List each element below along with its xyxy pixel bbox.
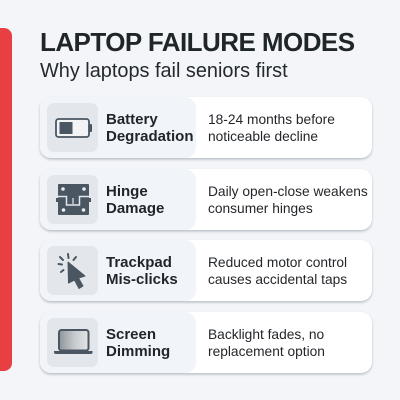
heading: hinge damage: Hinge xyxy=(106,182,148,200)
title: LAPTOP FAILURE MODES xyxy=(40,27,355,57)
description: screen xyxy=(208,326,325,359)
description: screen: Backlight fades, no xyxy=(208,326,324,342)
icon: hinge xyxy=(47,175,98,224)
icon: battery xyxy=(47,103,98,152)
left section: battery xyxy=(40,97,196,158)
description: battery: noticeable decline xyxy=(208,129,318,144)
heading: battery degradation xyxy=(106,110,194,145)
description: screen: replacement option xyxy=(208,344,325,359)
heading: trackpad mis-clicks: Mis-clicks xyxy=(106,271,178,288)
description: battery: 18-24 months before xyxy=(208,112,335,126)
description: battery xyxy=(208,112,335,144)
panel: screen dimming xyxy=(40,312,372,373)
heading: trackpad mis-clicks xyxy=(106,254,178,288)
panel: battery degradation xyxy=(40,97,372,158)
heading: screen dimming: Screen xyxy=(106,326,156,342)
description: trackpad: Reduced motor control xyxy=(208,254,347,270)
description: trackpad: causes accidental taps xyxy=(208,272,347,287)
heading: hinge damage: Damage xyxy=(106,200,164,217)
left section: screen xyxy=(40,312,196,373)
heading: trackpad mis-clicks: Trackpad xyxy=(106,254,172,270)
heading: battery degradation: Battery xyxy=(106,110,158,128)
icon: cursor clicks xyxy=(47,246,98,295)
description: hinge: Daily open-close weakens xyxy=(208,184,368,198)
description: hinge xyxy=(208,184,368,216)
panel: hinge damage xyxy=(40,169,372,230)
left section: trackpad xyxy=(40,240,196,301)
subtitle: Why laptops fail seniors first xyxy=(40,60,288,82)
icon: laptop xyxy=(47,318,98,367)
heading: screen dimming xyxy=(106,326,170,360)
description: trackpad xyxy=(208,254,347,287)
heading: screen dimming: Dimming xyxy=(106,343,170,360)
left section: hinge xyxy=(40,169,196,230)
red accent bar xyxy=(0,28,12,371)
heading: hinge damage xyxy=(106,182,164,217)
heading: battery degradation: Degradation xyxy=(106,128,194,145)
description: hinge: consumer hinges xyxy=(208,201,313,216)
panel: trackpad mis-clicks xyxy=(40,240,372,301)
